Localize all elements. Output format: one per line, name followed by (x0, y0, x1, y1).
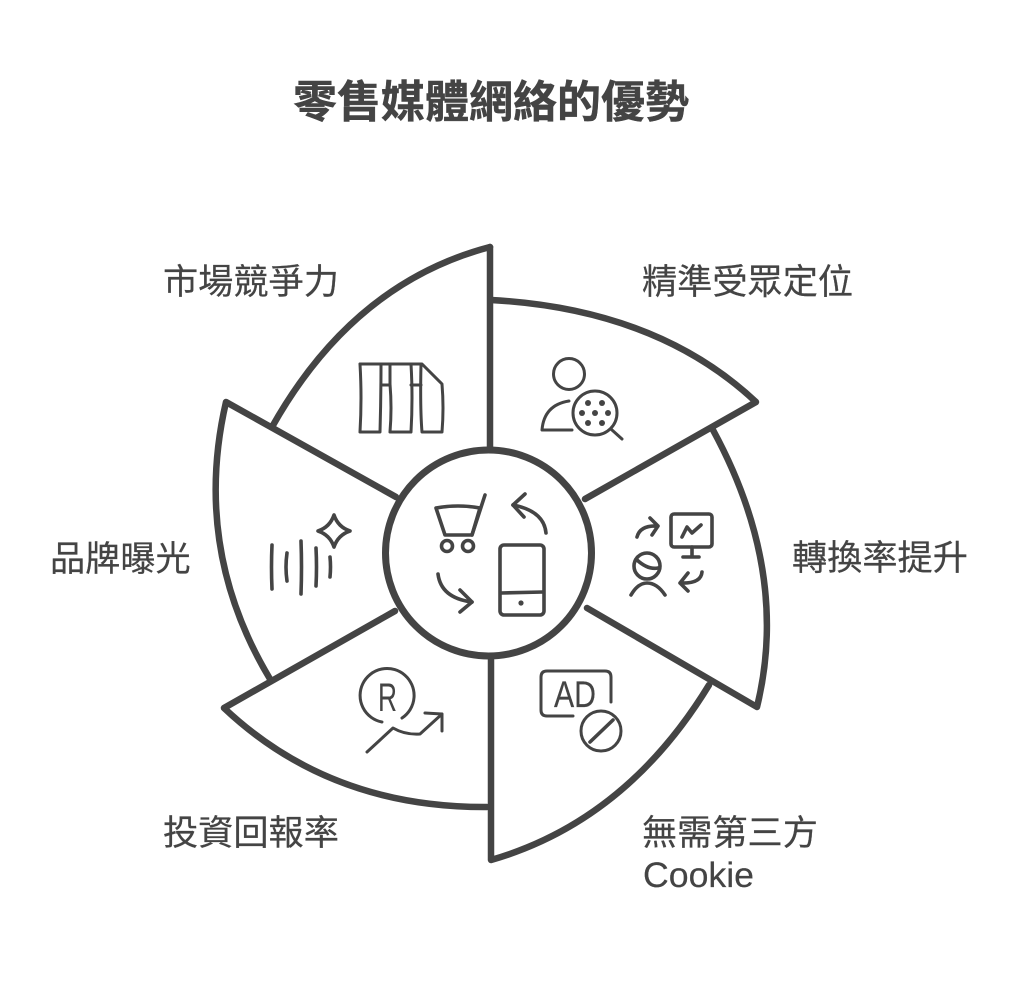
icon: registered mark with rising arrow (360, 668, 442, 752)
icon: monitor, person and arrows (631, 514, 712, 595)
icon: shopping cart (436, 495, 485, 552)
label: no third-party cookie: Cookie (643, 856, 754, 895)
icon: AD blocked (541, 671, 621, 751)
label: conversion uplift: 轉換率提升 (792, 539, 968, 578)
label: return on investment: 投資回報率 (163, 814, 339, 853)
panel: conversion uplift segment (587, 430, 767, 707)
panel: market competitiveness segment (272, 247, 490, 447)
title: 零售媒體網絡的優勢 (293, 78, 689, 127)
icon: AD blocked: AD (554, 674, 596, 715)
panel: center circle (386, 450, 592, 656)
label: brand exposure: 品牌曝光 (50, 540, 191, 579)
icon: sound bars and sparkle (272, 515, 350, 594)
label: no third-party cookie: 無需第三方 (642, 814, 818, 853)
label: audience targeting: 精準受眾定位 (642, 263, 853, 302)
icon: smartphone (500, 545, 544, 615)
icon: center arrow bottom (438, 574, 472, 612)
icon: registered mark with rising arrow: R (378, 676, 397, 720)
icon: buildings (360, 364, 443, 432)
label: no third-party cookie (642, 814, 818, 895)
panel: audience targeting segment (491, 300, 756, 499)
label: market competitiveness: 市場競爭力 (163, 263, 339, 302)
panel: return on investment segment (224, 611, 487, 807)
panel: no third-party cookie segment (491, 660, 709, 860)
panel: brand exposure segment (216, 402, 396, 679)
icon: center arrow top (513, 494, 546, 533)
icon: person with magnifier (542, 358, 622, 439)
